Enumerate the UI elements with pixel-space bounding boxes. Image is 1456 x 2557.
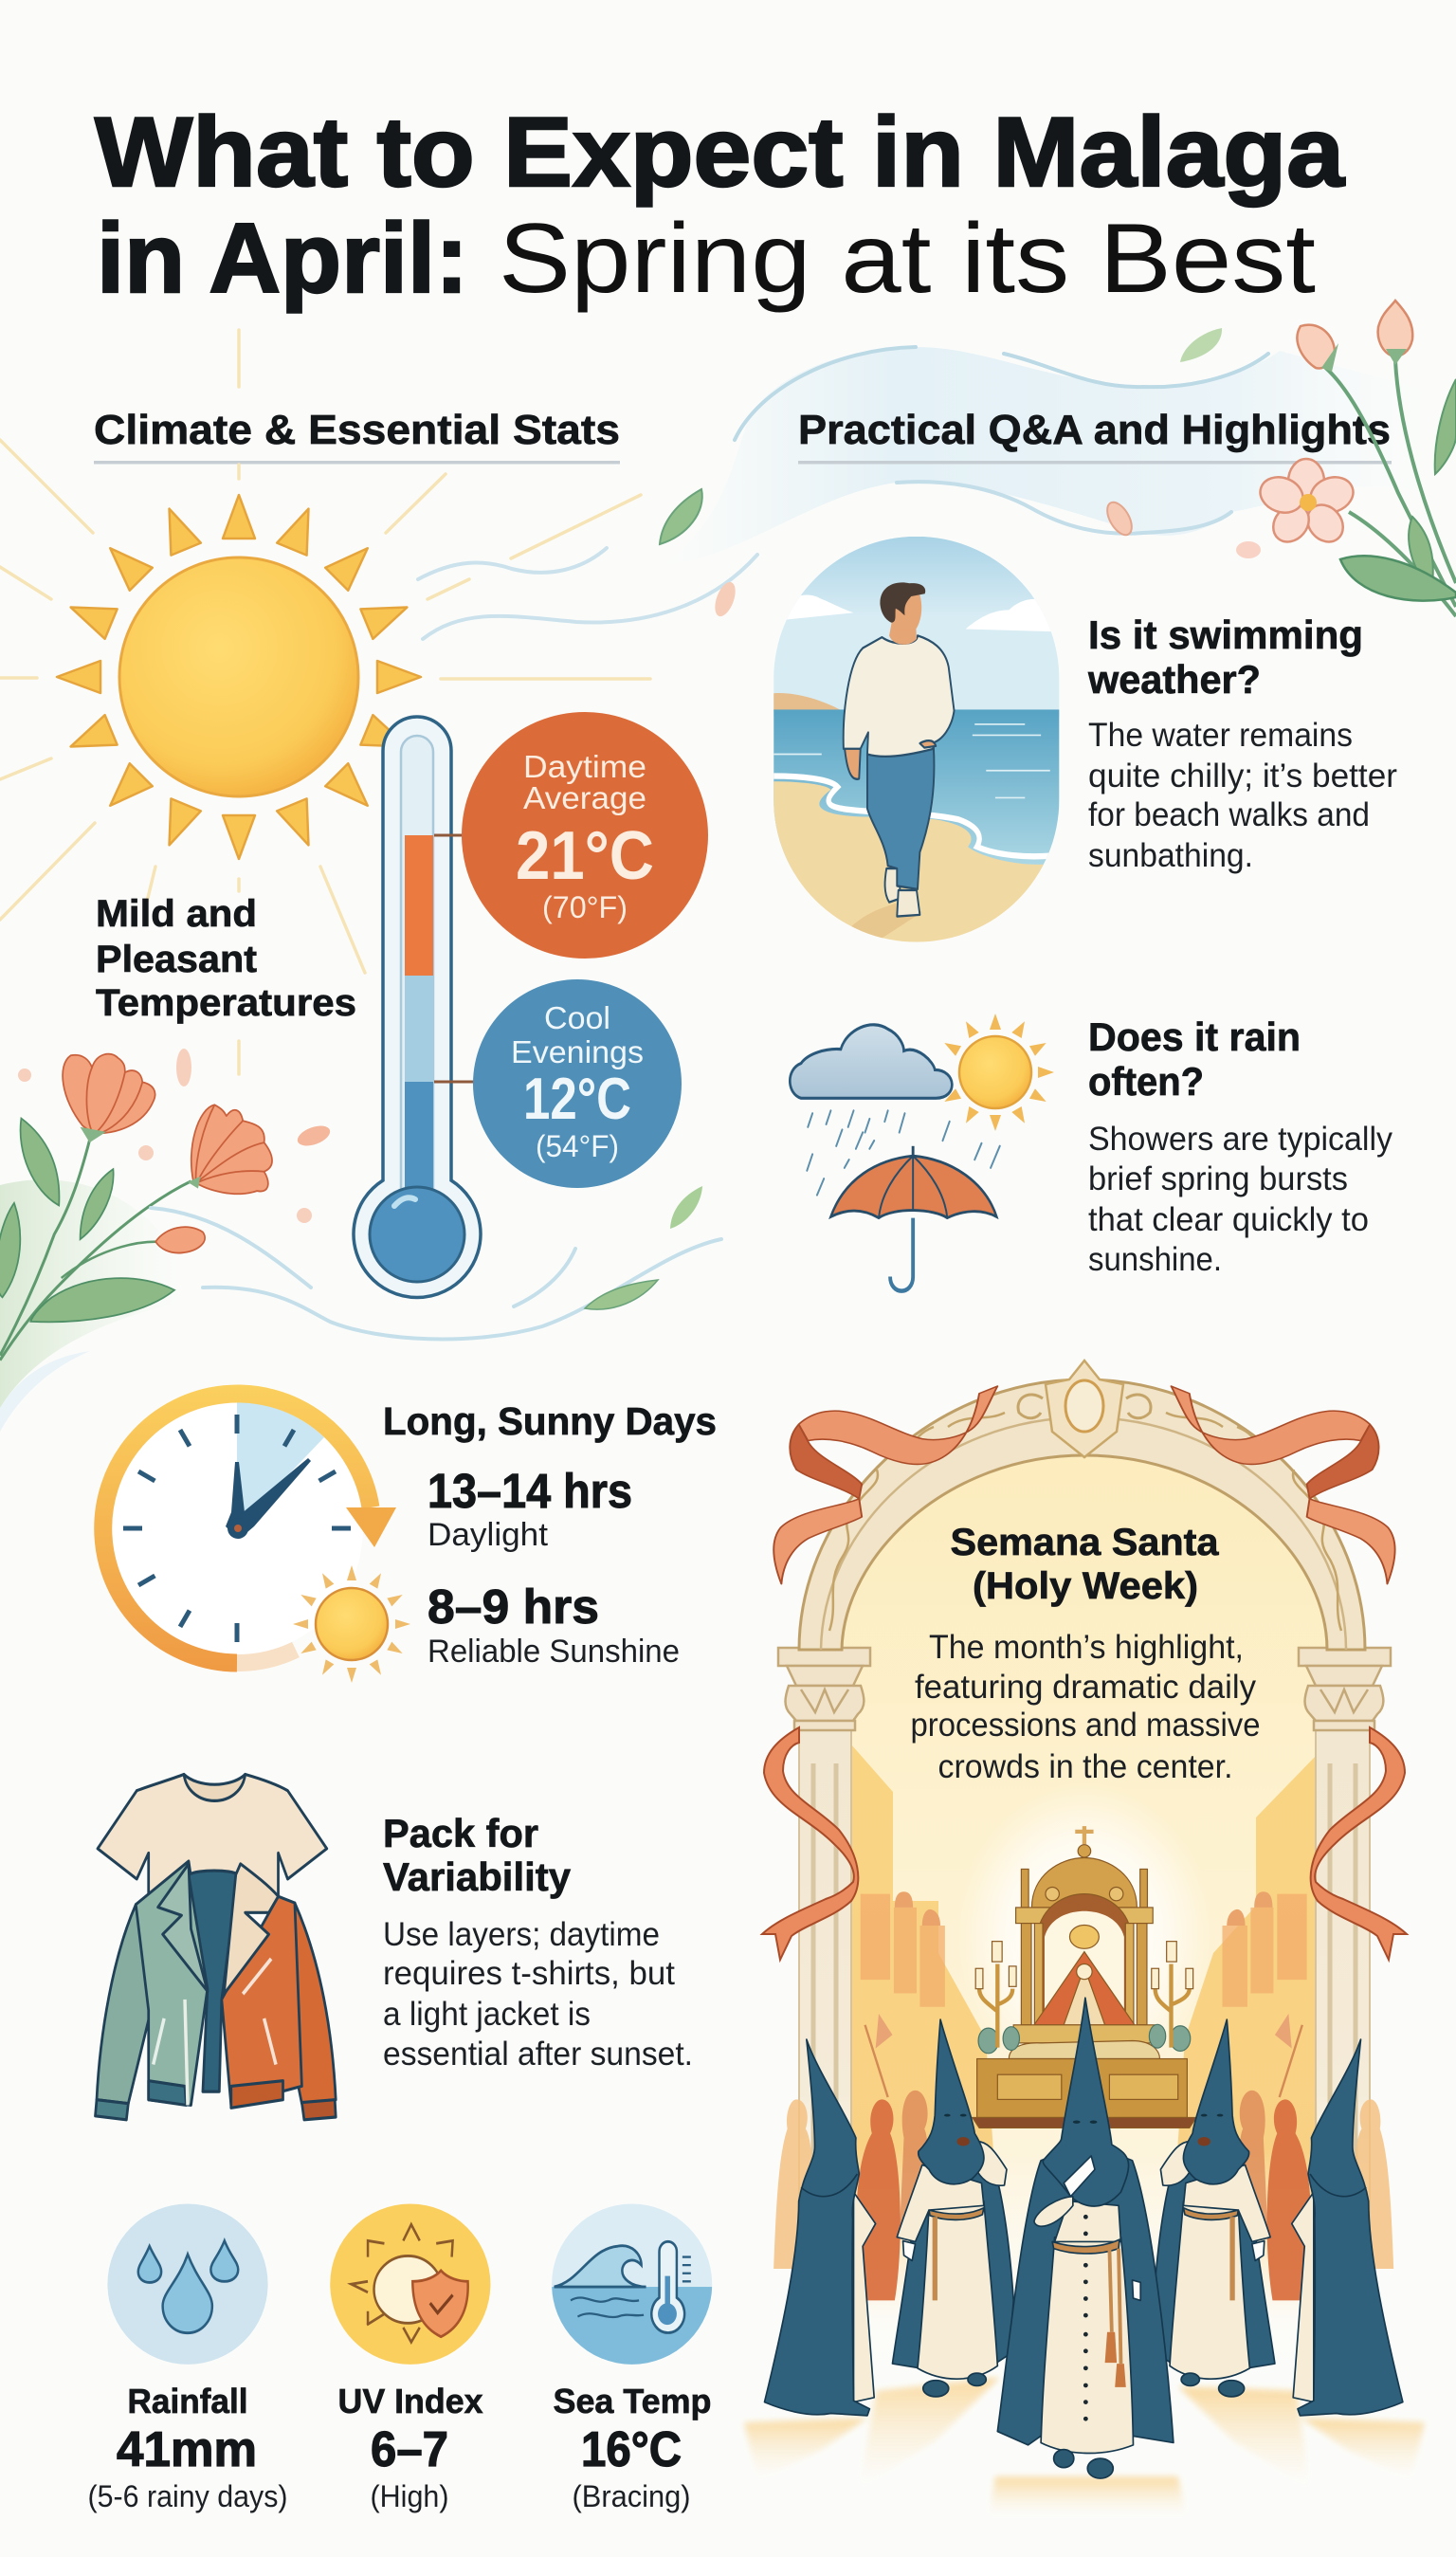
icon: t-shirt and jacket [95, 1775, 336, 2120]
callout: cool evenings: Cool [544, 1000, 610, 1035]
stat: rainfall: (5-6 rainy days) [87, 2479, 288, 2513]
title: What to Expect in Malaga [95, 98, 1345, 208]
text: rain question: Showers are typically [1088, 1121, 1392, 1158]
text: long sunny days: Daylight [428, 1517, 549, 1553]
text: rain question: sunshine. [1088, 1241, 1222, 1278]
text: mild and pleasant temperatures [96, 893, 356, 1024]
icon: wave and thermometer [552, 2204, 712, 2368]
stat: rainfall: Rainfall [127, 2382, 248, 2420]
callout: cool evenings: (54°F) [536, 1129, 619, 1163]
text: mild and pleasant temperatures: Mild and [96, 893, 257, 935]
section heading: practical: Practical Q&A and Highlights [798, 407, 1391, 453]
wind ribbons: top right [418, 347, 1431, 639]
stat: sea temp: (Bracing) [573, 2479, 690, 2513]
procession scene [744, 1826, 1425, 2517]
callout: daytime average: Average [523, 780, 646, 815]
icon: uv sun and shield [330, 2204, 490, 2365]
text: mild and pleasant temperatures: Temperatures [96, 982, 356, 1024]
text: long sunny days: Long, Sunny Days [383, 1399, 717, 1443]
penitent: inner right [1154, 2019, 1275, 2397]
text: swimming question: for beach walks and [1088, 796, 1370, 833]
text: swimming question: Is it swimming [1088, 612, 1363, 657]
text: pack for variability [383, 1811, 693, 2073]
stat: uv index: (High) [370, 2479, 449, 2513]
callout: daytime average: (70°F) [542, 890, 628, 924]
text: semana santa: crowds in the center. [938, 1748, 1232, 1785]
text: swimming question: sunbathing. [1088, 837, 1253, 874]
text: semana santa: processions and massive [910, 1707, 1261, 1744]
ribbon: lower right [1311, 1727, 1407, 1960]
text: long sunny days: 8–9 hrs [428, 1580, 599, 1634]
arch band [799, 1361, 1365, 1650]
floating leaves: lower [585, 1186, 702, 1309]
text: semana santa: (Holy Week) [973, 1565, 1198, 1607]
callout: daytime average: 21°C [516, 818, 654, 894]
callout: cool evenings [473, 979, 682, 1188]
icon: small sun [293, 1565, 410, 1683]
stat: sea temp: 16°C [581, 2422, 682, 2477]
penitent: centre [997, 1998, 1174, 2478]
text: rain question: Does it rain [1088, 1014, 1301, 1059]
icon: clock with sweep arrow [103, 1394, 396, 1663]
text: swimming question: quite chilly; it’s better [1088, 758, 1397, 794]
callout: cool evenings: Evenings [511, 1034, 644, 1069]
floor light shafts [744, 2377, 1425, 2517]
wind curves: lower [151, 1208, 721, 1339]
text: pack for variability: Pack for [383, 1811, 538, 1855]
stat: sea temp [554, 2382, 711, 2513]
ribbon: upper left [774, 1386, 997, 1584]
text: swimming question: weather? [1087, 657, 1261, 702]
stat: uv index: 6–7 [371, 2422, 448, 2477]
text: swimming question [1087, 612, 1397, 874]
title: in April: [97, 204, 468, 314]
text: semana santa: featuring dramatic daily [915, 1669, 1256, 1706]
text: mild and pleasant temperatures: Pleasant [96, 939, 257, 980]
icon: cloud, rain and umbrella [790, 1025, 1000, 1291]
background street buildings [851, 1744, 1318, 2323]
text: pack for variability: essential after sunset. [383, 2036, 693, 2073]
float: virgin under baldachin [973, 1826, 1196, 2128]
text: rain question: often? [1088, 1059, 1204, 1104]
illustration: man walking on beach [774, 537, 1059, 944]
text: pack for variability: Use layers; daytime [383, 1916, 660, 1953]
stat: uv index [337, 2382, 483, 2513]
callout: daytime average [462, 712, 708, 959]
columns [778, 1648, 1391, 2304]
crowd and banners left [774, 1891, 945, 2300]
text: semana santa [910, 1522, 1261, 1785]
left flowers and wash [0, 1054, 272, 1432]
text: pack for variability: Variability [383, 1854, 572, 1899]
crowd and banners right [1222, 1891, 1393, 2300]
stat: rainfall [87, 2382, 288, 2513]
text: pack for variability: requires t-shirts, but [383, 1955, 675, 1992]
text: long sunny days [383, 1399, 717, 1670]
ribbon: upper right [1171, 1386, 1395, 1584]
title [95, 98, 1345, 314]
icon: rain drops [107, 2204, 268, 2365]
penitent: inner left [892, 2019, 1013, 2397]
stat: sea temp: Sea Temp [554, 2382, 711, 2420]
penitent: outer left [765, 2039, 876, 2416]
panel: semana santa arch [744, 1361, 1425, 2517]
callout: daytime average: Daytime [523, 749, 646, 784]
text: rain question [1088, 1014, 1392, 1278]
stat: rainfall: 41mm [117, 2422, 257, 2477]
callout: cool evenings: 12°C [523, 1067, 631, 1132]
text: pack for variability: a light jacket is [383, 1996, 591, 2033]
title: Spring at its Best [499, 204, 1316, 314]
floating leaves and petals: top [660, 328, 1261, 619]
icon: large sun [57, 495, 421, 859]
stat: uv index: UV Index [337, 2382, 483, 2420]
icon: sun behind cloud [941, 1014, 1054, 1131]
text: rain question: brief spring bursts [1088, 1160, 1348, 1197]
icons: rainfall, uv, sea temperature [107, 2204, 712, 2368]
section heading: climate: Climate & Essential Stats [94, 407, 620, 453]
top right flowers [1255, 301, 1456, 616]
text: swimming question: The water remains [1088, 717, 1353, 754]
text: rain question: that clear quickly to [1088, 1201, 1369, 1238]
floating petals: left [18, 1049, 333, 1223]
thermometer [354, 717, 481, 1298]
sun rays: thin faint lines [0, 330, 650, 1074]
arch inner background [842, 1455, 1327, 2389]
text: semana santa: The month’s highlight, [929, 1629, 1244, 1666]
text: long sunny days: Reliable Sunshine [428, 1634, 680, 1670]
text: semana santa: Semana Santa [950, 1522, 1219, 1563]
penitent: outer right [1292, 2039, 1403, 2416]
text: long sunny days: 13–14 hrs [428, 1464, 632, 1518]
ribbon: lower left [762, 1727, 858, 1960]
